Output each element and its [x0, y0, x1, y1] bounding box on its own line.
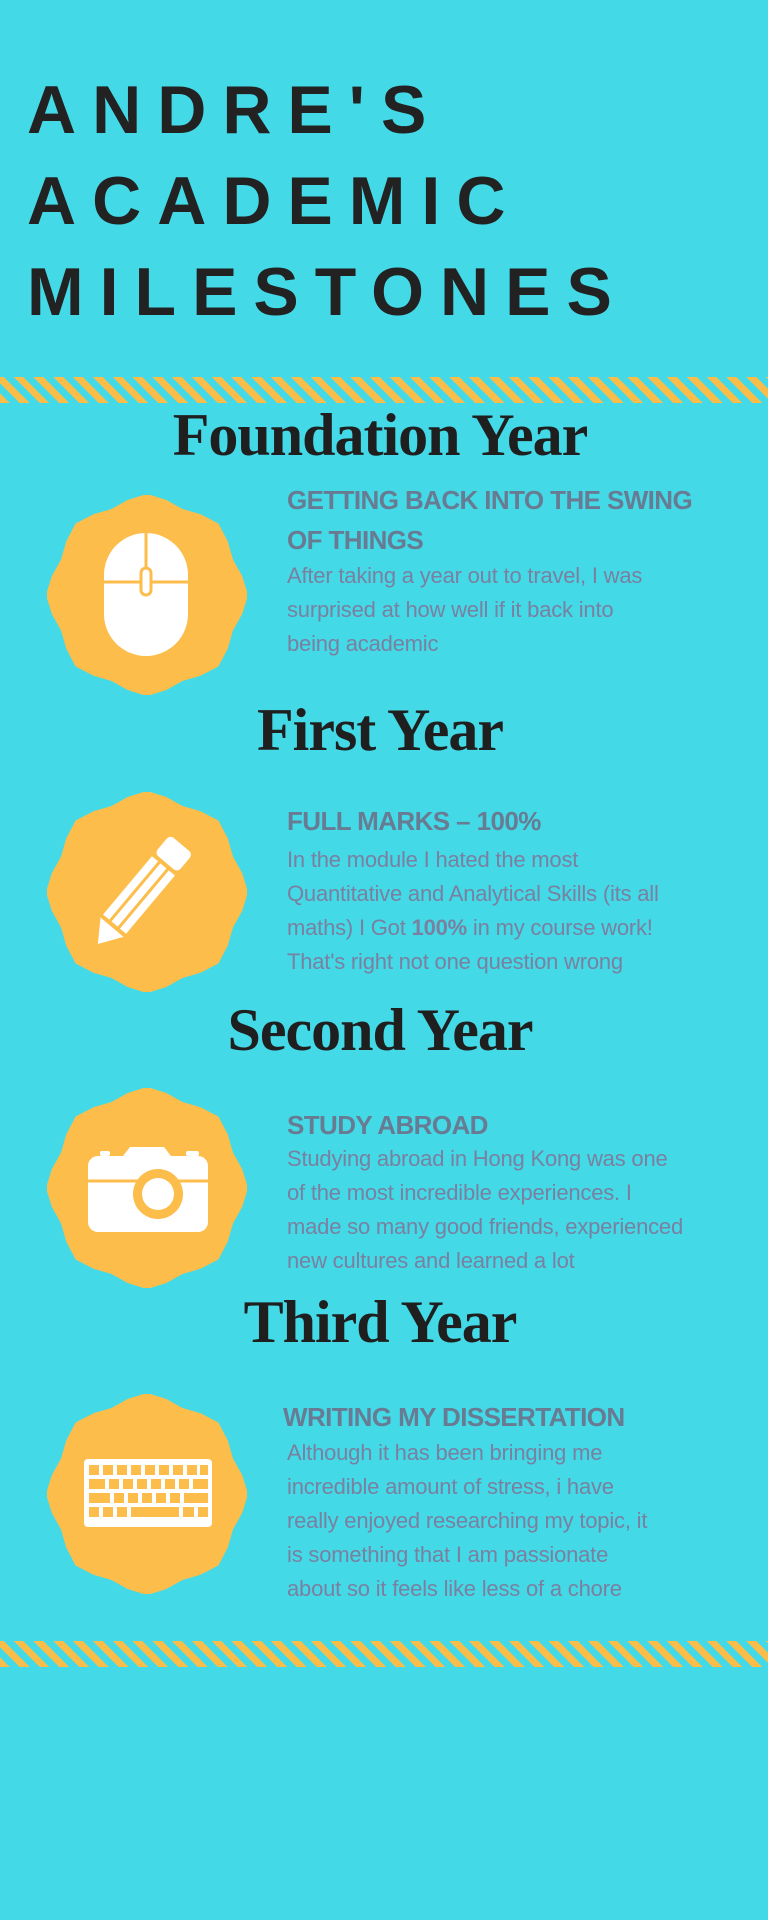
- body: maths) I Got 100% in my course work!: [287, 915, 653, 940]
- title: ACADEMIC: [27, 163, 521, 239]
- heading: first year: First Year: [257, 697, 503, 763]
- body: [287, 1440, 648, 1601]
- subheading: [287, 485, 692, 555]
- heading: second year: Second Year: [227, 997, 533, 1063]
- body: [287, 847, 659, 974]
- subheading: GETTING BACK INTO THE SWING: [287, 485, 692, 515]
- icon: keyboard badge: [47, 1394, 247, 1594]
- title: MILESTONES: [27, 254, 628, 330]
- heading: foundation year: Foundation Year: [173, 402, 587, 468]
- body: Quantitative and Analytical Skills (its all: [287, 881, 659, 906]
- title: [27, 72, 628, 330]
- icon: pencil badge: [47, 792, 247, 992]
- body: new cultures and learned a lot: [287, 1248, 575, 1273]
- subheading: FULL MARKS – 100%: [287, 806, 541, 836]
- heading: third year: Third Year: [244, 1289, 516, 1355]
- body: of the most incredible experiences. I: [287, 1180, 632, 1205]
- body: In the module I hated the most: [287, 847, 578, 872]
- subheading: STUDY ABROAD: [287, 1110, 488, 1140]
- body: surprised at how well if it back into: [287, 597, 613, 622]
- body: Although it has been bringing me: [287, 1440, 602, 1465]
- text: first year: [287, 806, 659, 974]
- body: [287, 563, 642, 656]
- body: being academic: [287, 631, 438, 656]
- body: [287, 1146, 683, 1273]
- subheading: OF THINGS: [287, 525, 423, 555]
- body: That's right not one question wrong: [287, 949, 623, 974]
- icon: mouse badge: [47, 495, 247, 695]
- title: ANDRE'S: [27, 72, 442, 148]
- body: Studying abroad in Hong Kong was one: [287, 1146, 668, 1171]
- text: foundation: [287, 485, 692, 656]
- body: is something that I am passionate: [287, 1542, 608, 1567]
- body: about so it feels like less of a chore: [287, 1576, 622, 1601]
- subheading: WRITING MY DISSERTATION: [283, 1402, 625, 1432]
- text: third year: [283, 1402, 648, 1601]
- body: incredible amount of stress, i have: [287, 1474, 614, 1499]
- body: really enjoyed researching my topic, it: [287, 1508, 647, 1533]
- text: second year: [287, 1110, 683, 1273]
- body: After taking a year out to travel, I was: [287, 563, 642, 588]
- icon: camera badge: [47, 1088, 247, 1288]
- body: made so many good friends, experienced: [287, 1214, 683, 1239]
